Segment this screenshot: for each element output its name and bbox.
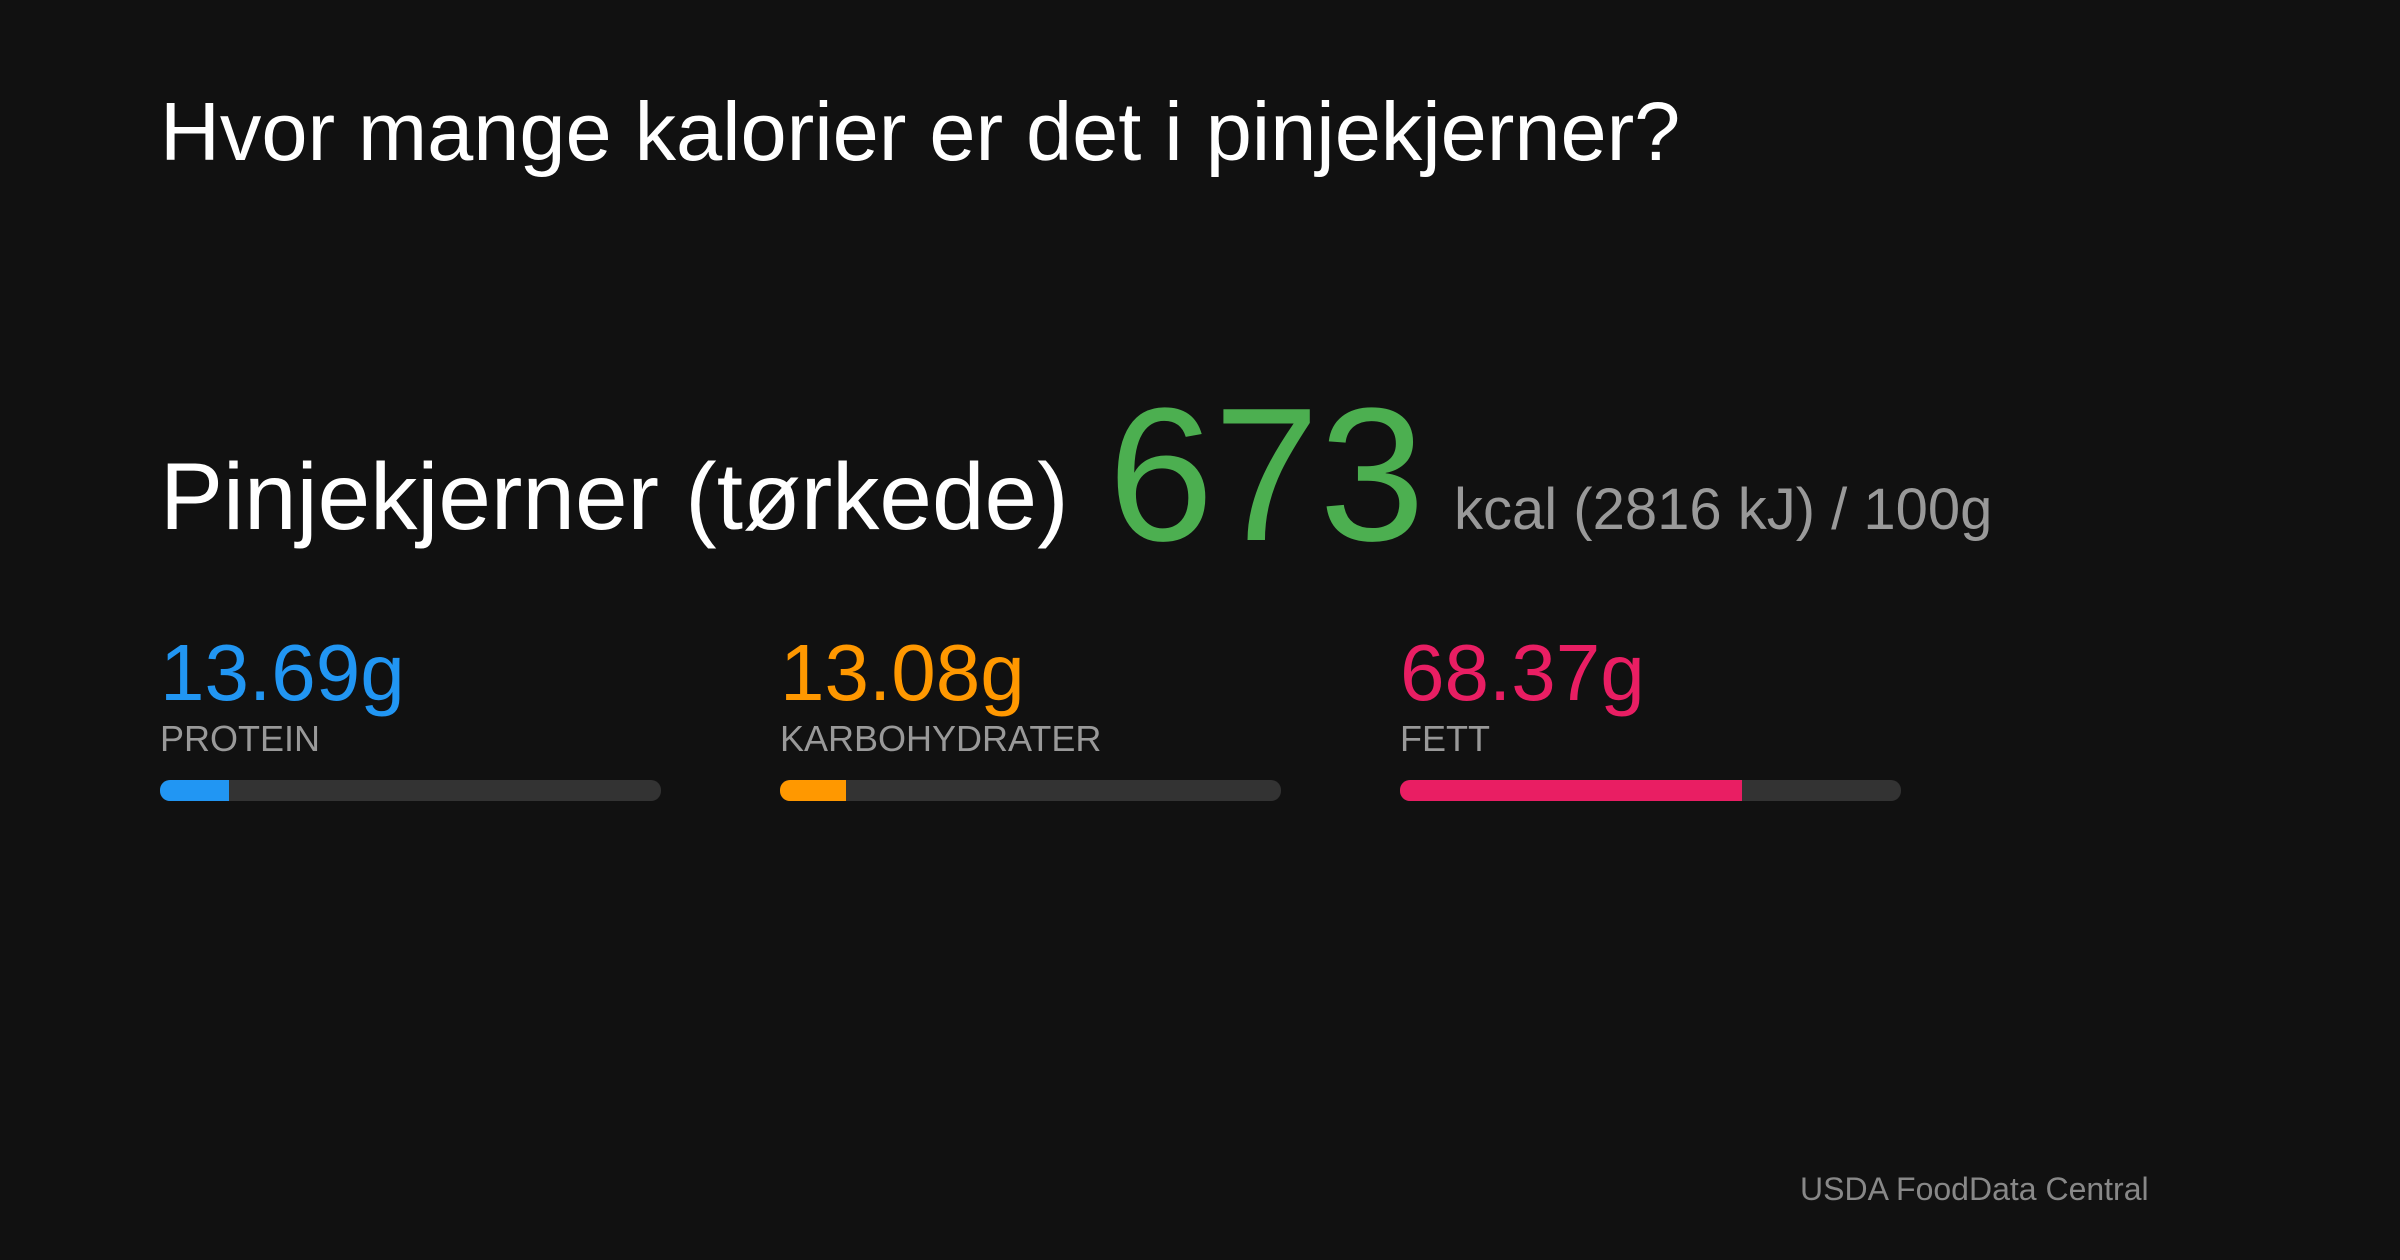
fat label: FETT	[1400, 718, 1490, 759]
carbohydrate bar	[780, 780, 1281, 800]
protein value: 13.69g	[160, 628, 405, 717]
protein bar	[160, 780, 661, 800]
title: Hvor mange kalorier er det i pinjekjerner?	[160, 85, 1680, 178]
calorie value: 673	[1108, 369, 1425, 581]
carbohydrate label: KARBOHYDRATER	[780, 718, 1101, 759]
protein label: PROTEIN	[160, 718, 320, 759]
macro: fat	[1400, 628, 1901, 801]
calorie unit: kcal (2816 kJ) / 100g	[1454, 477, 1992, 542]
fat bar	[1400, 780, 1901, 800]
macro: carbohydrates	[780, 628, 1281, 801]
food name: Pinjekjerner (tørkede)	[160, 444, 1069, 550]
fat value: 68.37g	[1400, 628, 1645, 717]
carbohydrate value: 13.08g	[780, 628, 1025, 717]
source credit: USDA FoodData Central	[1800, 1171, 2149, 1207]
macro: protein	[160, 628, 661, 801]
